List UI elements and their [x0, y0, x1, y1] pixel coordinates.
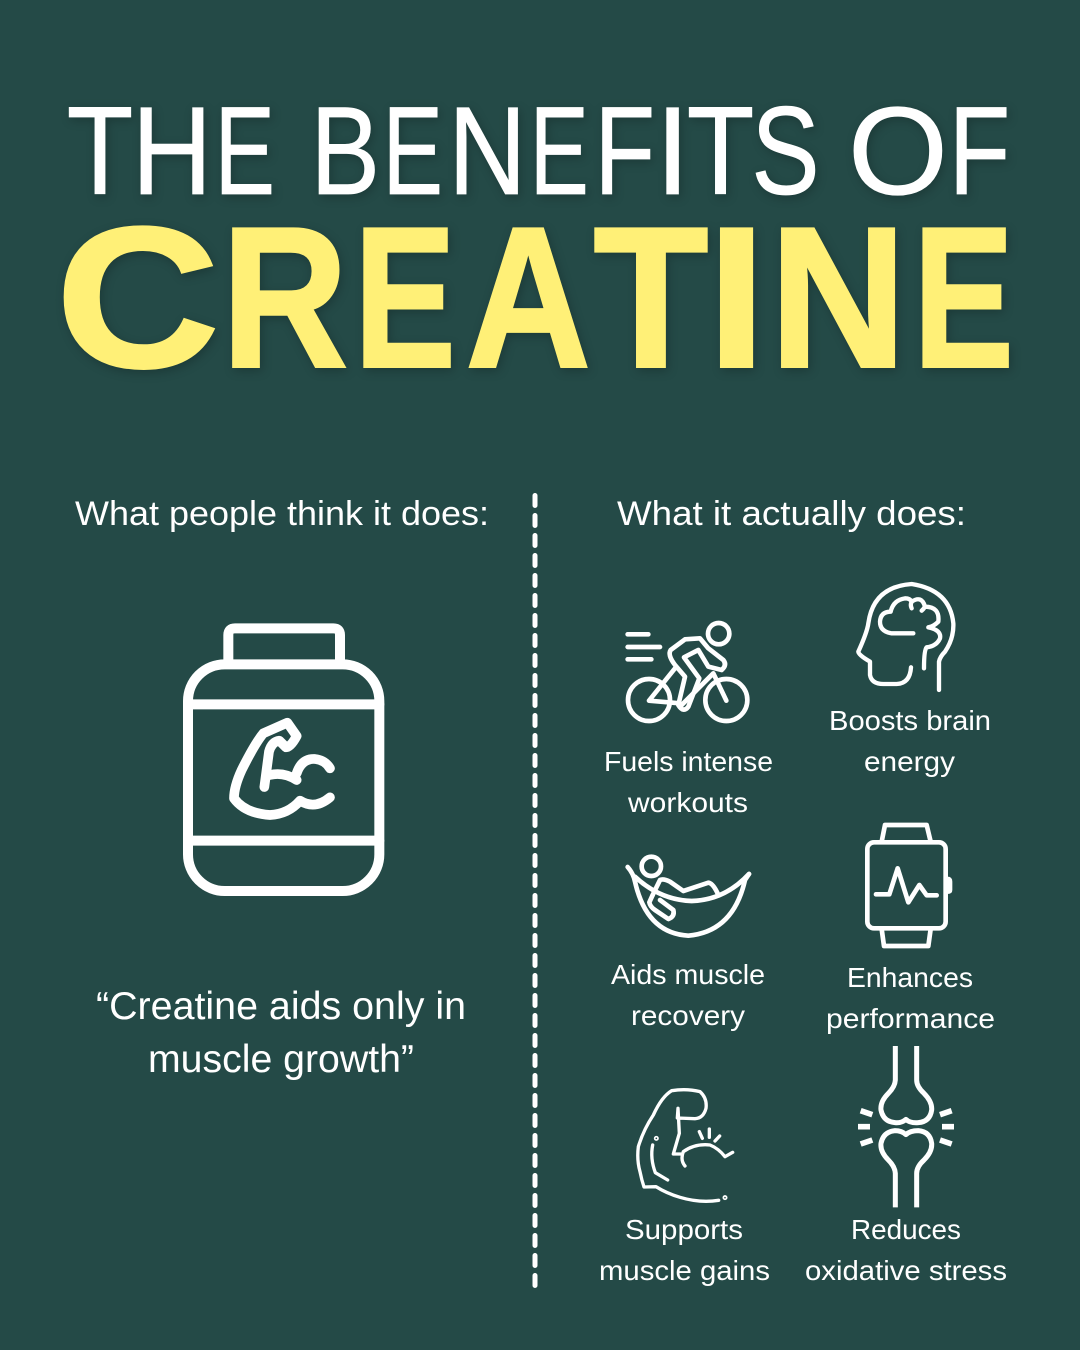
- title line: creatine: E: [914, 186, 1014, 410]
- label: supports muscle gains: [599, 1214, 770, 1286]
- label: enhances performance: Enhances: [847, 962, 973, 993]
- title line: the benefits of: F: [594, 82, 655, 221]
- title line: creatine: N: [770, 186, 906, 410]
- title line: creatine: R: [222, 186, 348, 410]
- title line: the benefits of: N: [448, 82, 526, 221]
- title line: the benefits of: S: [751, 82, 820, 221]
- right column heading: What it actually does:: [617, 495, 966, 533]
- title line: creatine: E: [354, 186, 456, 410]
- label: boosts brain energy: energy: [864, 746, 955, 777]
- icon: knee joint: [858, 1046, 954, 1207]
- label: enhances performance: [826, 962, 995, 1034]
- left column heading: What people think it does:: [75, 495, 489, 533]
- title line: the benefits of: I: [655, 82, 690, 221]
- dashed column divider: [532, 496, 538, 1288]
- title line: creatine: T: [594, 186, 708, 410]
- label: reduces oxidative stress: Reduces: [851, 1214, 961, 1245]
- label: fuels intense workouts: Fuels intense: [604, 746, 773, 777]
- title line: the benefits of: T: [67, 82, 133, 221]
- title line: the benefits of: B: [310, 82, 380, 221]
- label: supports muscle gains: Supports: [625, 1214, 743, 1245]
- label: aids muscle recovery: recovery: [631, 1000, 745, 1031]
- title line: the benefits of: E: [530, 82, 589, 221]
- title line: creatine: A: [466, 186, 590, 410]
- label: reduces oxidative stress: [805, 1214, 1007, 1286]
- icon: head with brain: [858, 584, 953, 690]
- title line: the benefits of: F: [949, 82, 1010, 221]
- title line: creatine: I: [708, 186, 766, 410]
- icon: cyclist: [628, 623, 747, 721]
- label: aids muscle recovery: [611, 959, 765, 1031]
- title line: the benefits of: T: [687, 82, 754, 221]
- icon: person in hammock: [628, 857, 749, 936]
- icon: smartwatch with pulse: [867, 825, 951, 946]
- quote: [96, 985, 466, 1081]
- title line: creatine: C: [56, 186, 219, 410]
- title line: the benefits of: H: [132, 82, 212, 221]
- quote: muscle growth”: [148, 1038, 414, 1081]
- label: supports muscle gains: muscle gains: [599, 1255, 770, 1286]
- icon: supplement jar with bicep: [188, 628, 379, 891]
- label: boosts brain energy: [829, 705, 991, 777]
- quote: “Creatine aids only in: [96, 985, 466, 1028]
- label: aids muscle recovery: Aids muscle: [611, 959, 765, 990]
- title line: the benefits of: O: [848, 82, 948, 221]
- label: enhances performance: performance: [826, 1003, 995, 1034]
- title line: the benefits of: E: [383, 82, 443, 221]
- label: fuels intense workouts: [604, 746, 773, 818]
- label: fuels intense workouts: workouts: [627, 787, 748, 818]
- title line: the benefits of: E: [215, 82, 275, 221]
- icon: flexed arm: [638, 1090, 733, 1201]
- title: [56, 82, 1014, 410]
- label: boosts brain energy: Boosts brain: [829, 705, 991, 736]
- label: reduces oxidative stress: oxidative stress: [805, 1255, 1007, 1286]
